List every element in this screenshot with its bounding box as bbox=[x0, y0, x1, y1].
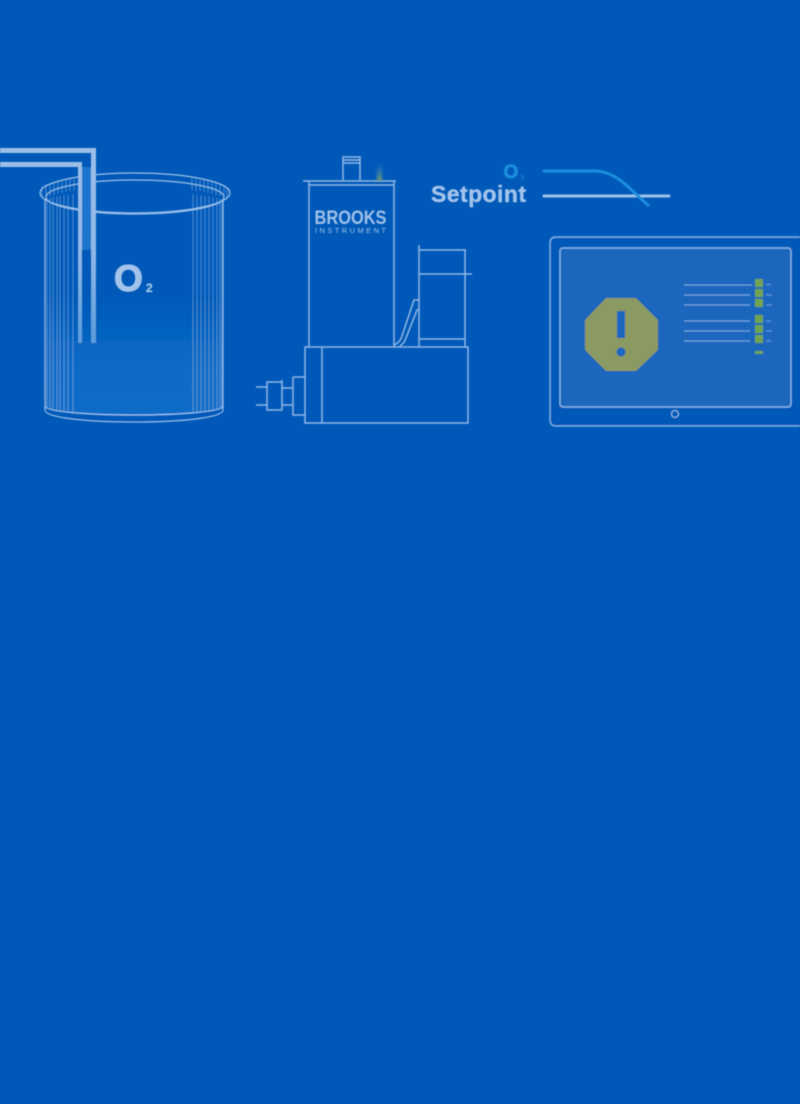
O2 label in vessel: O bbox=[114, 258, 143, 299]
liquid in vessel bbox=[46, 295, 223, 416]
vessel walls bbox=[45, 200, 223, 410]
warning octagon bbox=[585, 298, 658, 371]
BROOKS logo bbox=[314, 207, 386, 235]
O2 label in vessel: 2 bbox=[146, 281, 153, 295]
O2 curve bbox=[544, 171, 648, 205]
vessel body hatching bbox=[47, 194, 222, 413]
BROOKS logo: BROOKS bbox=[314, 207, 386, 229]
home button bbox=[672, 410, 678, 418]
tablet alert bbox=[550, 237, 800, 426]
BROOKS logo: INSTRUMENT bbox=[315, 226, 386, 235]
vessel bottom rim bbox=[45, 406, 223, 422]
tablet screen bbox=[560, 248, 791, 407]
green indicator glow bbox=[377, 162, 382, 181]
O2 label: O bbox=[504, 162, 518, 183]
controller outline bbox=[256, 157, 472, 423]
vessel top rim bbox=[40, 173, 230, 214]
vessel illustration bbox=[0, 148, 230, 422]
tablet frame bbox=[550, 237, 800, 426]
status list bbox=[684, 279, 772, 354]
mass flow controller drawing bbox=[256, 157, 472, 423]
setpoint label: Setpoint bbox=[431, 181, 526, 207]
gas pipe bbox=[0, 148, 96, 343]
setpoint line bbox=[544, 194, 669, 198]
O2 label: 2 bbox=[521, 175, 524, 181]
setpoint chart bbox=[431, 162, 669, 207]
